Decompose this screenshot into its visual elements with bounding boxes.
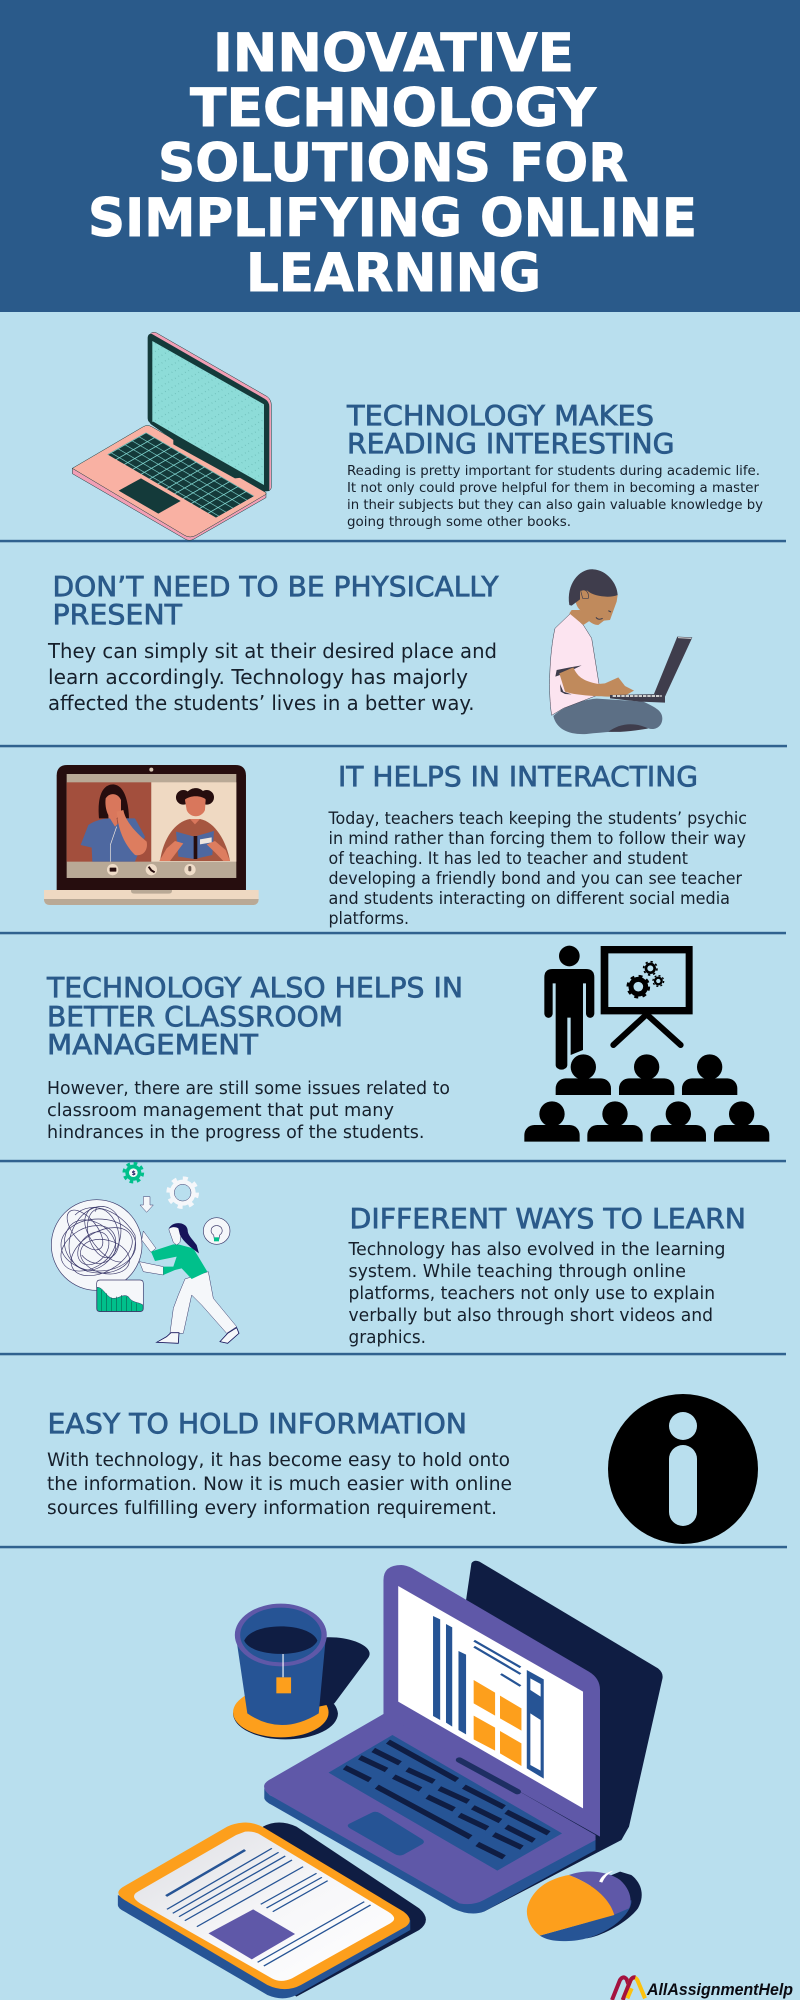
panel: different ways to learn <box>51 1163 746 1348</box>
body text: platforms. <box>328 909 409 928</box>
heading <box>52 571 499 631</box>
laptop <box>264 1561 663 1914</box>
heading: DON’T NEED TO BE PHYSICALLY <box>52 571 499 603</box>
body text <box>348 1239 726 1348</box>
body text: Reading is pretty important for students during academic life. <box>347 463 760 479</box>
panel: technology makes reading interesting <box>72 332 763 540</box>
heading <box>346 400 674 460</box>
title banner: TECHNOLOGY <box>190 78 597 139</box>
icon: woman pushing tangled scribble ball: $ <box>132 1170 136 1177</box>
body text <box>47 1449 512 1519</box>
body text <box>47 1079 450 1143</box>
body text: graphics. <box>348 1327 426 1348</box>
body text: Technology has also evolved in the learning <box>348 1239 726 1260</box>
body text: hindrances in the progress of the students. <box>47 1123 424 1143</box>
body text: learn accordingly. Technology has majorly <box>48 665 468 689</box>
icon: classroom presentation <box>524 946 769 1142</box>
heading: PRESENT <box>52 599 182 631</box>
title banner: SIMPLIFYING ONLINE <box>88 188 697 249</box>
heading: IT HELPS IN INTERACTING <box>338 761 698 793</box>
icon: information symbol <box>608 1394 758 1544</box>
heading: BETTER CLASSROOM <box>47 1001 343 1033</box>
panel: don't need to be physically present <box>47 569 692 734</box>
title banner: INNOVATIVE <box>213 23 574 84</box>
body text: It not only could prove helpful for them in becoming a master <box>347 480 759 496</box>
logo: AllAssignmentHelp: AllAssignmentHelp <box>646 1981 793 1999</box>
body text <box>328 809 747 928</box>
logo: AllAssignmentHelp <box>612 1977 793 2000</box>
body text: the information. Now it is much easier with online <box>47 1473 512 1495</box>
body text: affected the students’ lives in a better way. <box>48 691 474 715</box>
heading: MANAGEMENT <box>47 1029 258 1061</box>
body text: developing a friendly bond and you can see teacher <box>328 869 742 888</box>
icon: laptop video call <box>44 765 259 905</box>
heading: READING INTERESTING <box>347 428 674 460</box>
icon: boy with laptop <box>550 569 692 734</box>
body text: verbally but also through short videos and <box>348 1305 713 1326</box>
body text: They can simply sit at their desired place and <box>47 639 497 663</box>
body text: Today, teachers teach keeping the students’ psychic <box>328 809 747 828</box>
body text <box>347 463 763 530</box>
heading: TECHNOLOGY MAKES <box>346 400 654 432</box>
body text: in their subjects but they can also gain valuable knowledge by <box>347 497 763 513</box>
heading: DIFFERENT WAYS TO LEARN <box>350 1203 746 1235</box>
title banner: LEARNING <box>246 243 541 304</box>
heading <box>46 972 463 1061</box>
body text: platforms, teachers not only use to explain <box>348 1283 715 1304</box>
body text: and students interacting on different social media <box>328 889 730 908</box>
heading: EASY TO HOLD INFORMATION <box>48 1408 467 1440</box>
icon: woman pushing tangled scribble ball <box>51 1163 239 1343</box>
heading: TECHNOLOGY ALSO HELPS IN <box>46 972 463 1004</box>
mouse <box>527 1871 642 1941</box>
body text <box>47 639 497 715</box>
panel: better classroom management <box>46 946 769 1143</box>
panel: easy to hold information <box>47 1394 758 1544</box>
body text: With technology, it has become easy to hold onto <box>47 1449 510 1471</box>
body text: system. While teaching through online <box>348 1261 686 1282</box>
body text: sources fulfilling every information requirement. <box>47 1497 497 1519</box>
body text: However, there are still some issues related to <box>47 1079 450 1099</box>
illustration: laptop, cup, tablet and mouse <box>118 1561 663 1998</box>
panel: it helps in interacting <box>44 761 747 928</box>
icon: pink laptop <box>72 332 271 540</box>
body text: going through some other books. <box>347 514 571 530</box>
title banner <box>0 0 800 312</box>
body text: of teaching. It has led to teacher and student <box>328 849 688 868</box>
cup of tea <box>233 1606 370 1739</box>
tablet <box>118 1822 426 1998</box>
body text: in mind rather than forcing them to follow their way <box>328 829 746 848</box>
title banner: SOLUTIONS FOR <box>158 133 628 194</box>
body text: classroom management that put many <box>47 1101 394 1121</box>
